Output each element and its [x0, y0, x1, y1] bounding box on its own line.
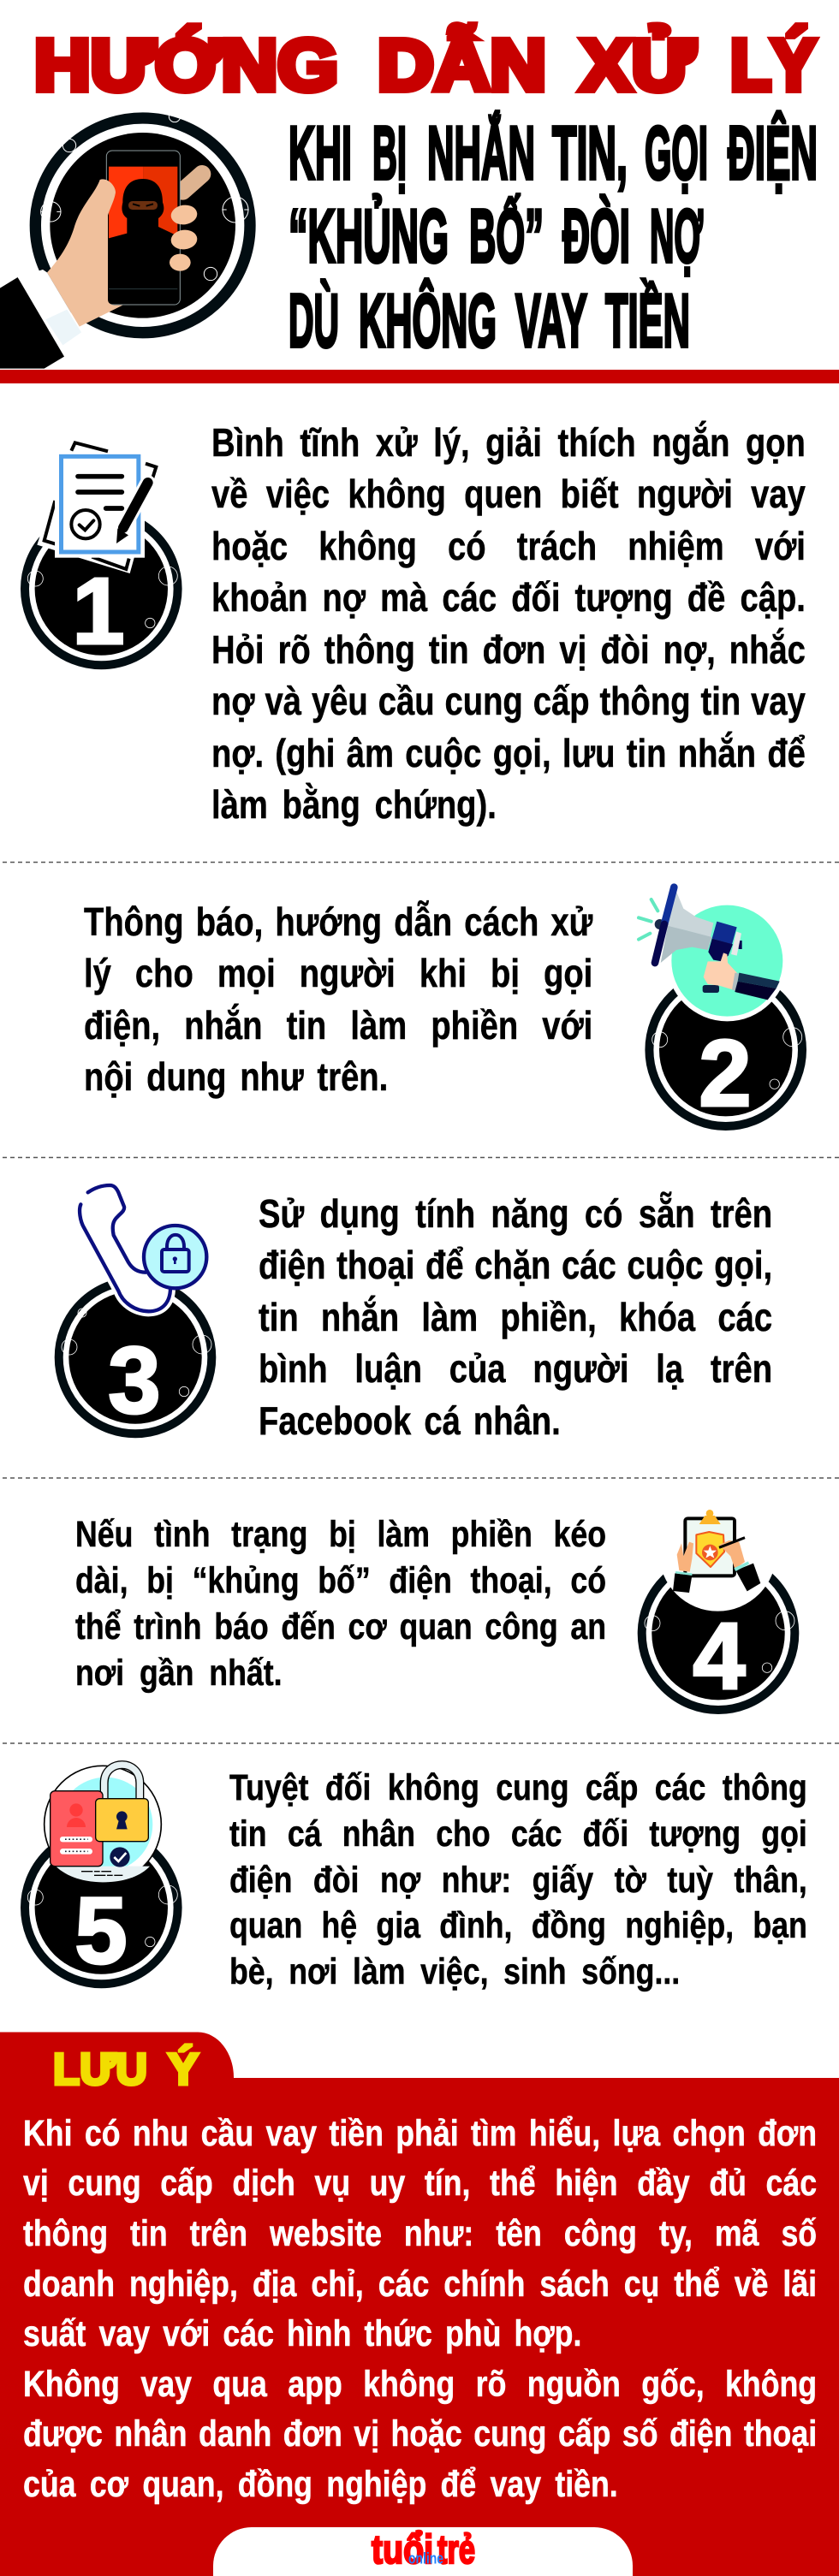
number circle 1 — [25, 513, 178, 665]
title: HƯỚNG — [34, 25, 338, 105]
step 2 text — [84, 899, 592, 1099]
icon: megaphone in hand — [639, 887, 788, 1021]
step 2 text: nội dung như trên. — [84, 1054, 388, 1099]
note heading: LƯU — [53, 2045, 147, 2095]
step 5 text: điện đòi nợ như: giấy tờ tuỳ thân, — [229, 1860, 806, 1901]
step 3 text: Facebook cá nhân. — [259, 1398, 561, 1443]
subtitle: DÙ — [289, 278, 339, 363]
logo: tuổi trẻ online: tuổi — [372, 2526, 433, 2572]
step 4 text: nơi gần nhất. — [75, 1653, 282, 1694]
note panel background with tab — [0, 2032, 839, 2576]
note heading — [53, 2044, 199, 2095]
step 5 text: tin cá nhân cho các đối tượng gọi — [229, 1813, 806, 1855]
red header bar — [0, 370, 839, 383]
icon: clipboard with police badge — [659, 1494, 777, 1611]
step 2 text: điện, nhắn tin làm phiền với — [84, 1003, 592, 1048]
subtitle: BỊ — [372, 110, 407, 195]
title: DẪN — [378, 25, 546, 105]
note text: suất vay với các hình thức phù hợp. — [23, 2313, 581, 2354]
number circle 4 — [642, 1557, 794, 1710]
step 1 text: Bình tĩnh xử lý, giải thích ngắn gọn — [211, 420, 806, 465]
subtitle: “KHỦNG — [289, 193, 449, 278]
subtitle: KHÔNG — [359, 278, 497, 363]
step 3 text — [259, 1191, 772, 1443]
subtitle: TIN, — [552, 110, 628, 195]
badge 2 with megaphone icon — [639, 887, 802, 1126]
step 1 text: về việc không quen biết người vay — [211, 472, 806, 516]
subtitle: KHI — [289, 110, 352, 195]
logo plate — [213, 2527, 633, 2576]
digit 1: 1 — [72, 559, 125, 664]
subtitle — [289, 110, 818, 363]
step 5 text: quan hệ gia đình, đồng nghiệp, bạn — [229, 1905, 806, 1946]
step 1 text: khoản nợ mà các đối tượng đề cập. — [211, 575, 806, 620]
step 2 text: lý cho mọi người khi bị gọi — [84, 951, 592, 995]
number circle 2 — [649, 973, 802, 1126]
subtitle: ĐÒI — [562, 193, 630, 278]
step 1 text — [211, 420, 806, 827]
step 1 text: nợ và yêu cầu cung cấp thông tin vay — [211, 679, 806, 723]
note text: doanh nghiệp, địa chỉ, các chính sách cụ thể về lãi — [23, 2264, 817, 2305]
note text: của cơ quan, đồng nghiệp để vay tiền. — [23, 2464, 618, 2505]
note text: thông tin trên website như: tên công ty, mã số — [23, 2213, 817, 2254]
title: LÝ — [730, 25, 816, 105]
note text — [22, 2113, 817, 2505]
note heading: Ý — [168, 2044, 199, 2095]
step 3 text: bình luận của người lạ trên — [259, 1346, 772, 1391]
digit 5: 5 — [74, 1879, 128, 1984]
subtitle: BỐ” — [469, 193, 544, 278]
logo: tuổi trẻ online: trẻ — [437, 2526, 475, 2572]
subtitle: NHẮN — [427, 110, 535, 195]
step 1 text: làm bằng chứng). — [211, 782, 497, 827]
step 4 text — [75, 1514, 606, 1694]
badge 5 with padlock icon — [25, 1765, 178, 1984]
step 5 text — [229, 1767, 806, 1992]
note text: được nhân danh đơn vị hoặc cung cấp số điện thoại — [23, 2413, 817, 2454]
step 3 text: tin nhắn làm phiền, khóa các — [259, 1295, 772, 1339]
badge 4 with clipboard icon — [642, 1494, 794, 1710]
logo: tuổi trẻ online: online — [408, 2550, 443, 2567]
step 2 text: Thông báo, hướng dẫn cách xử — [84, 899, 592, 943]
icon: document and pen — [37, 439, 160, 573]
step 4 text: dài, bị “khủng bố” điện thoại, có — [75, 1560, 606, 1601]
note text: Khi có nhu cầu vay tiền phải tìm hiểu, lựa chọn đơn — [23, 2113, 817, 2154]
badge 3 with phone lock icon — [59, 1185, 211, 1433]
icon: phone handset and padlock — [80, 1185, 206, 1311]
header illustration: hand holding phone with masked caller — [0, 110, 250, 369]
badge 1 with document icon — [25, 439, 178, 665]
number circle 5 — [25, 1831, 178, 1984]
subtitle: GỌI — [645, 110, 708, 195]
step 3 text: điện thoại để chặn các cuộc gọi, — [259, 1243, 772, 1287]
title: XỬ — [580, 25, 695, 105]
digit 3: 3 — [108, 1328, 161, 1433]
step 4 text: Nếu tình trạng bị làm phiền kéo — [75, 1514, 606, 1555]
step 3 text: Sử dụng tính năng có sẵn trên — [259, 1191, 772, 1236]
title — [34, 25, 816, 105]
note text: Không vay qua app không rõ nguồn gốc, không — [23, 2364, 817, 2405]
step 4 text: thể trình báo đến cơ quan công an — [75, 1606, 606, 1647]
digit 2: 2 — [699, 1021, 752, 1126]
subtitle: VAY — [515, 278, 587, 363]
digit 4: 4 — [693, 1604, 746, 1709]
step 1 text: hoặc không có trách nhiệm với — [211, 524, 806, 568]
number circle 3 — [59, 1281, 211, 1433]
subtitle: TIỀN — [605, 278, 690, 363]
step 5 text: bè, nơi làm việc, sinh sống... — [229, 1951, 680, 1992]
step 5 text: Tuyệt đối không cung cấp các thông — [229, 1767, 806, 1808]
step 1 text: nợ. (ghi âm cuộc gọi, lưu tin nhắn để — [211, 731, 806, 775]
icon: ID card and padlock — [45, 1765, 161, 1883]
subtitle: NỢ — [650, 193, 703, 278]
note text: vị cung cấp dịch vụ uy tín, thể hiện đầy đủ các — [23, 2163, 817, 2204]
step 1 text: Hỏi rõ thông tin đơn vị đòi nợ, nhắc — [211, 627, 806, 672]
